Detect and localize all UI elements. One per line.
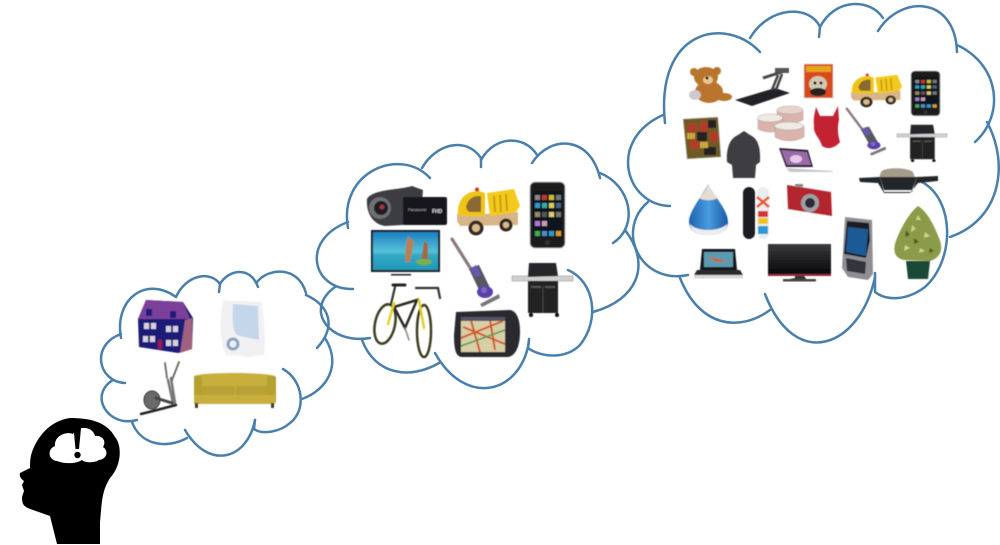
icon: kung fu panda dvd — [804, 64, 833, 98]
icon: elliptical trainer — [141, 362, 179, 414]
icon: droplet humidifier — [689, 184, 728, 235]
thought cloud medium — [317, 141, 638, 388]
icon: gas grill small — [897, 125, 947, 162]
thinking head silhouette — [20, 418, 120, 544]
icon: white humidifier — [221, 300, 265, 357]
icon: camcorder — [367, 186, 447, 226]
icon: patterned rug — [683, 117, 721, 159]
icon: potted topiary tree — [894, 206, 941, 279]
thought cloud small — [101, 272, 332, 456]
items: large cloud — [683, 64, 947, 282]
icon: yellow sofa — [194, 373, 276, 408]
icon: smartphone — [530, 182, 565, 248]
icon: toy dump truck — [457, 188, 520, 236]
icon: dollhouse — [138, 300, 193, 353]
icon: red camera — [787, 184, 832, 216]
icon: portable grill — [859, 168, 938, 193]
exclamation mark — [74, 428, 81, 458]
icon: snowboards — [743, 187, 769, 239]
icon: gps navigator — [454, 310, 520, 357]
icon: red swimsuit — [814, 106, 840, 148]
icon: teddy bear — [689, 67, 732, 103]
icon: dark jacket — [727, 131, 760, 178]
icon: road bicycle — [371, 285, 440, 357]
icon: upright vacuum — [452, 239, 500, 307]
items: medium cloud — [367, 182, 573, 357]
small cloud in head — [50, 428, 106, 463]
items: small cloud — [138, 300, 276, 414]
thought cloud large — [628, 4, 999, 342]
icon: camcorder: FHD — [432, 209, 443, 215]
icon: flat tv — [768, 244, 831, 282]
icon: upright vacuum small — [847, 109, 886, 156]
icon: camcorder: Panasonic — [408, 207, 427, 212]
icon: treadmill — [735, 68, 790, 106]
icon: blackberry phone — [842, 217, 873, 280]
icon: netbook — [694, 249, 743, 278]
icon: toy dump truck small — [851, 74, 902, 107]
icon: laptop — [779, 148, 833, 172]
icon: beach television — [371, 230, 440, 276]
icon: smartphone small — [911, 71, 940, 116]
icon: pink cookware — [758, 106, 804, 141]
icon: gas grill — [512, 263, 573, 317]
